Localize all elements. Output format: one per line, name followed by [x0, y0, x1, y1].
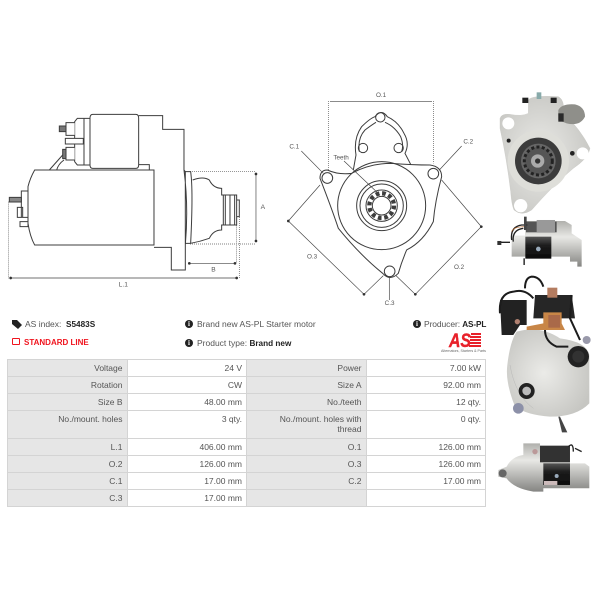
- flange outline: [320, 163, 442, 277]
- specification table: No./mount. holes with: [280, 414, 362, 424]
- specification table: 126.00 mm: [199, 459, 242, 469]
- side view technical drawing: [8, 114, 266, 289]
- specification table: 126.00 mm: [438, 442, 481, 452]
- specification table: Rotation: [91, 380, 122, 390]
- photo: starter side view 2: [498, 443, 589, 492]
- dimension labels: C.2: [463, 139, 474, 146]
- specification table: O.1: [348, 442, 362, 452]
- specification table: L.1: [111, 442, 122, 452]
- specification table: 406.00 mm: [199, 442, 242, 452]
- info row: producer: Producer: AS-PL: [424, 319, 486, 329]
- rear terminals: [17, 191, 28, 227]
- specification table: Power: [337, 363, 362, 373]
- upper lug: [353, 112, 411, 170]
- specification table: No./mount. holes: [58, 414, 122, 424]
- specification table: 7.00 kW: [450, 363, 481, 373]
- dimension labels: Teeth: [333, 155, 349, 162]
- drive circles: [338, 162, 426, 250]
- specification table: 17.00 mm: [443, 476, 481, 486]
- nose cone: [185, 172, 223, 243]
- dimension labels: C.1: [289, 143, 300, 150]
- specification table: 24 V: [224, 363, 242, 373]
- dimension labels: [289, 92, 474, 307]
- specification table: C.1: [109, 476, 122, 486]
- standard line badge: STANDARD LINE: [24, 338, 89, 347]
- icon: tags: [12, 320, 22, 329]
- AS-PL logo: Alternators, Starters & Parts: [441, 349, 486, 353]
- motor body: [28, 170, 154, 245]
- info row: product type: Product type: Brand new: [197, 338, 291, 348]
- dimension lines: [8, 171, 256, 278]
- specification table: 17.00 mm: [204, 476, 242, 486]
- pinion: [223, 195, 239, 225]
- AS-PL logo: [441, 331, 486, 353]
- dimension labels: O.2: [454, 264, 465, 271]
- dimension labels: L.1: [119, 282, 128, 289]
- dimension labels: C.3: [385, 300, 395, 307]
- specification table: [7, 359, 486, 507]
- specification table: Size A: [337, 380, 362, 390]
- dimension labels: O.3: [307, 253, 318, 260]
- dimension labels: A: [261, 204, 266, 211]
- specification table: Voltage: [94, 363, 122, 373]
- info row: producer: i: [416, 320, 418, 328]
- specification table: thread: [337, 424, 362, 434]
- specification table: No./teeth: [327, 397, 362, 407]
- info row: description: i: [188, 320, 190, 328]
- solenoid: [75, 114, 139, 168]
- specification table: 92.00 mm: [443, 380, 481, 390]
- dimension labels: B: [211, 266, 216, 273]
- holes: [322, 113, 439, 277]
- specification table: CW: [228, 380, 242, 390]
- specification table: O.2: [109, 459, 122, 469]
- solenoid terminals: [65, 123, 83, 160]
- specification table: Size B: [98, 397, 122, 407]
- info row: AS index: AS index: S5483S: [25, 319, 95, 329]
- photo: starter front view: [500, 92, 590, 213]
- dimension labels: O.1: [376, 92, 387, 99]
- specification table: 48.00 mm: [204, 397, 242, 407]
- drive housing: [139, 116, 187, 270]
- specification table: C.3: [109, 493, 122, 503]
- photo: starter side view 1: [497, 217, 582, 267]
- specification table: 3 qty.: [222, 414, 242, 424]
- photo: starter rear view: [500, 277, 591, 432]
- AS-PL logo: AS: [448, 331, 471, 352]
- specification table: C.2: [348, 476, 362, 486]
- info row: product type: i: [188, 339, 190, 347]
- dimension lines: [328, 101, 434, 170]
- dimension labels: [119, 204, 266, 289]
- specification table: O.3: [348, 459, 362, 469]
- specification table: 0 qty.: [461, 414, 481, 424]
- front view technical drawing: [287, 92, 483, 307]
- pinion teeth: [369, 193, 394, 218]
- specification table: 126.00 mm: [438, 459, 481, 469]
- info row: description: Brand new AS-PL Starter motor: [197, 319, 316, 329]
- specification table: 12 qty.: [456, 397, 481, 407]
- specification table: 17.00 mm: [204, 493, 242, 503]
